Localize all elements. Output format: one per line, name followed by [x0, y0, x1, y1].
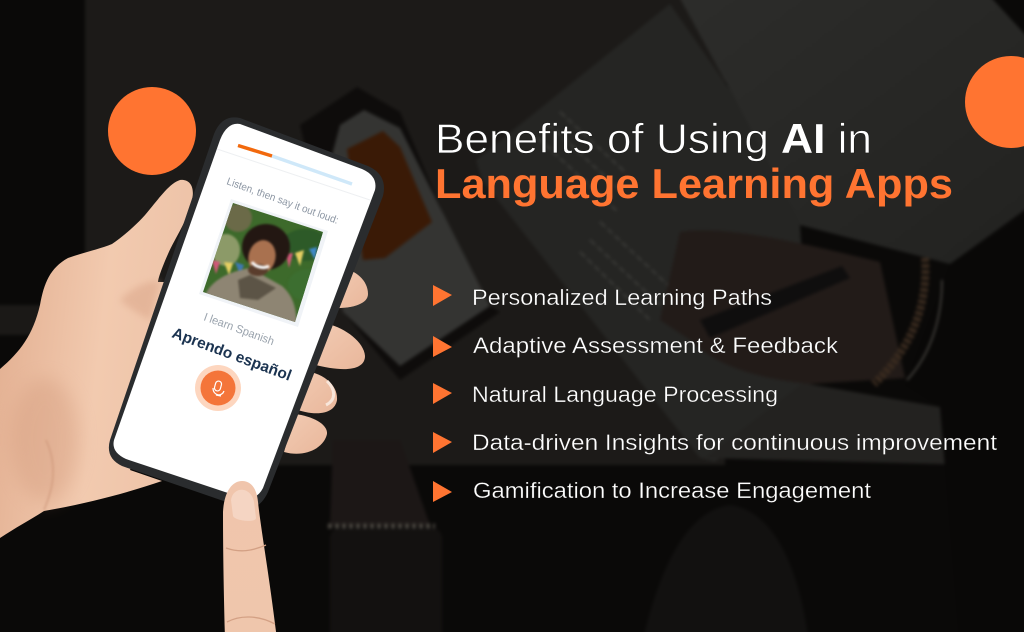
benefit 3: Natural Language Processing	[472, 382, 778, 407]
header divider	[217, 149, 370, 200]
fingernail	[231, 490, 256, 521]
phone body	[109, 117, 384, 508]
caption: I learn Spanish: I learn Spanish	[202, 312, 276, 348]
knuckle crease	[226, 545, 266, 551]
holding hand	[0, 180, 368, 538]
progress bar	[238, 146, 352, 184]
icon: microphone button	[195, 365, 241, 411]
decorative circle: left	[108, 87, 196, 175]
decorative circle: right	[965, 56, 1024, 148]
pointing finger	[223, 481, 277, 632]
faint arm at the bottom	[640, 505, 810, 632]
hair	[242, 224, 290, 270]
notebook right page	[670, 0, 1024, 264]
notebook left page	[476, 4, 810, 462]
photo of smiling man	[195, 195, 330, 330]
fingers behind the phone	[284, 268, 368, 454]
title	[435, 115, 953, 207]
beaded bracelet	[874, 258, 925, 384]
title line 1: Benefits of Using AI in	[435, 115, 872, 162]
smartphone	[109, 117, 384, 508]
palm shading	[11, 378, 79, 502]
background phone	[300, 87, 500, 380]
phone screen	[114, 124, 375, 498]
benefit 1: Personalized Learning Paths	[472, 285, 772, 310]
benefit 2: Adaptive Assessment & Feedback	[473, 333, 839, 358]
face	[246, 238, 278, 272]
phrase: Aprendo español: Aprendo español	[170, 325, 294, 385]
benefit 5: Gamification to Increase Engagement	[473, 478, 871, 503]
fingernail highlight	[326, 381, 334, 405]
title line 2: Language Learning Apps	[435, 160, 953, 207]
benefit 4: Data-driven Insights for continuous improvement	[472, 430, 997, 455]
bunting flags	[212, 260, 220, 274]
handwritten lines on the notebook	[538, 112, 668, 320]
forearm below the phone	[330, 440, 430, 525]
sleeve	[905, 205, 1024, 632]
pen	[700, 266, 850, 338]
benefits list	[433, 285, 997, 503]
shirt	[205, 268, 297, 325]
writing hand	[660, 230, 905, 384]
wall panel	[85, 0, 725, 465]
instruction text: Listen, then say it out loud:	[225, 176, 340, 227]
desk band under notebook	[705, 383, 975, 465]
palm and thumb	[0, 180, 205, 538]
